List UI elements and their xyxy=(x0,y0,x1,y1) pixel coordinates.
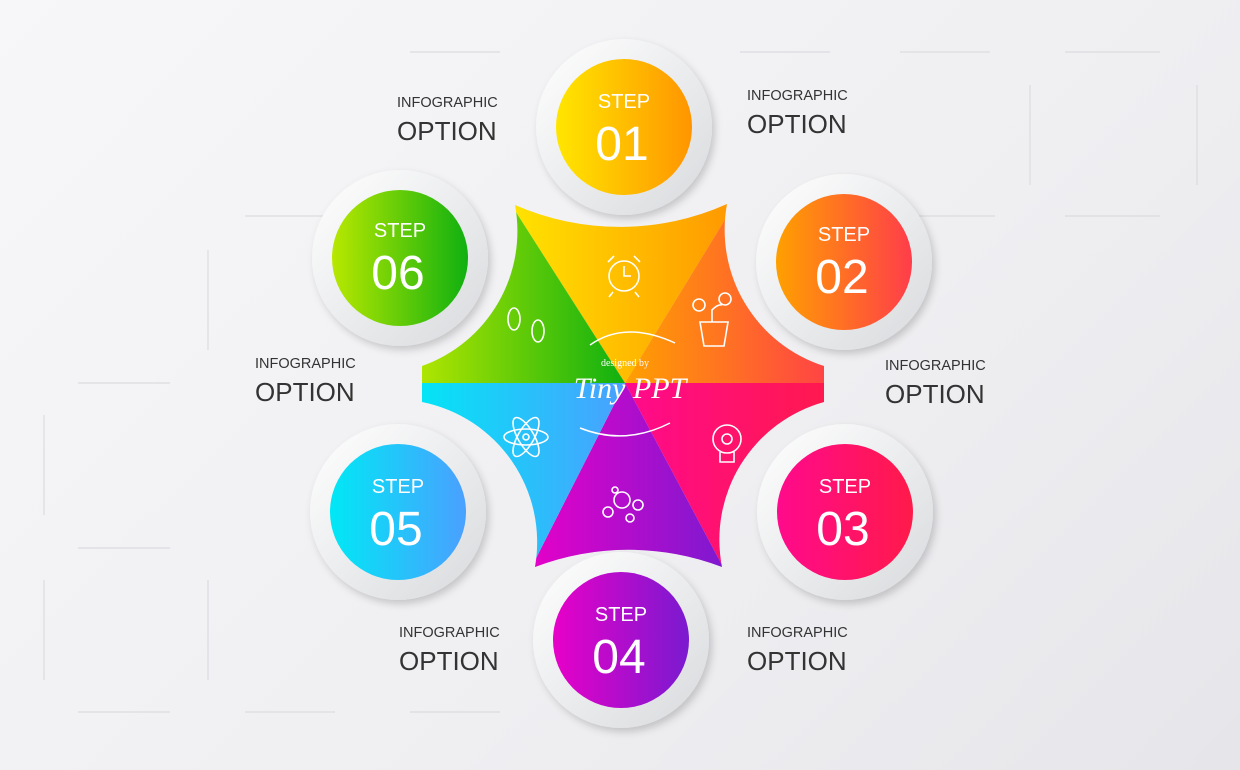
label: bottom-right option: INFOGRAPHIC xyxy=(747,625,848,641)
label: bottom-left option: OPTION xyxy=(399,646,499,676)
icon: footprints xyxy=(508,308,544,342)
icon: alarm clock xyxy=(608,256,640,297)
step 04: 04 xyxy=(592,631,646,684)
step 04 xyxy=(533,552,709,728)
label: top-right option: OPTION xyxy=(747,108,847,138)
icon: atom xyxy=(504,414,548,460)
step 03: 03 xyxy=(816,503,870,556)
label: mid-left option: INFOGRAPHIC xyxy=(255,356,356,372)
step 02: STEP xyxy=(818,224,870,246)
step 06 xyxy=(312,170,488,346)
icon: lightbulb xyxy=(713,425,741,462)
label: top-left option: OPTION xyxy=(397,116,497,146)
step 06: STEP xyxy=(374,220,426,242)
label: mid-right option xyxy=(885,358,986,408)
step 06: 06 xyxy=(371,247,425,300)
step 01 xyxy=(536,39,712,215)
logo: designed by TinyPPT xyxy=(574,332,689,436)
label: bottom-right option: OPTION xyxy=(747,646,847,676)
label: mid-left option: OPTION xyxy=(255,376,355,406)
label: mid-left option xyxy=(255,356,356,406)
step 05 xyxy=(310,424,486,600)
label: top-right option xyxy=(747,88,848,138)
label: mid-right option: INFOGRAPHIC xyxy=(885,358,986,374)
label: mid-right option: OPTION xyxy=(885,378,985,408)
label: top-left option: INFOGRAPHIC xyxy=(397,95,498,111)
step 05: STEP xyxy=(372,476,424,498)
step 04: STEP xyxy=(595,604,647,626)
logo: designed by TinyPPT: designed by xyxy=(601,358,649,369)
step 05: 05 xyxy=(369,503,423,556)
step 03: STEP xyxy=(819,476,871,498)
step 03 xyxy=(757,424,933,600)
label: top-right option: INFOGRAPHIC xyxy=(747,88,848,104)
step 02 xyxy=(756,174,932,350)
step 01: STEP xyxy=(598,91,650,113)
label: bottom-left option xyxy=(399,625,500,676)
label: bottom-right option xyxy=(747,625,848,676)
logo: designed by TinyPPT: Tiny PPT xyxy=(574,372,689,405)
label: bottom-left option: INFOGRAPHIC xyxy=(399,625,500,641)
step 01: 01 xyxy=(595,118,649,171)
icon: bubbles xyxy=(603,487,643,522)
central hexagon shape xyxy=(422,204,824,567)
decorative grid lines xyxy=(44,52,1197,712)
step 02: 02 xyxy=(815,251,869,304)
icon: flower pot xyxy=(693,293,731,346)
label: top-left option xyxy=(397,95,498,146)
